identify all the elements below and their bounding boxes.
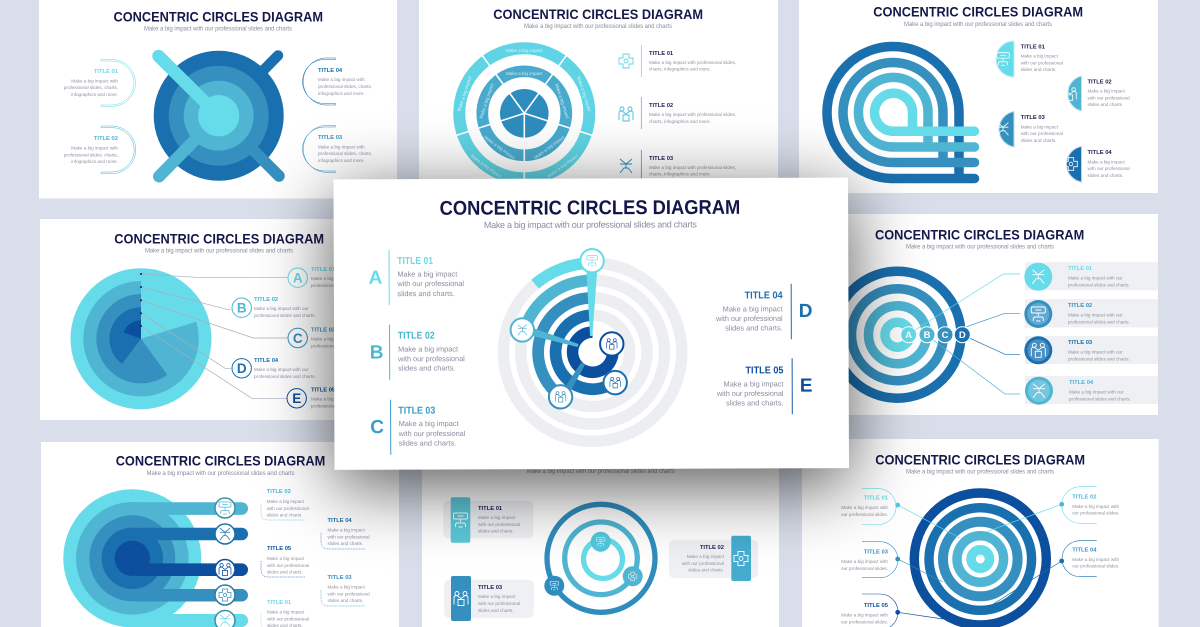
diagram: segmented rings and pie: Make a big impact bbox=[456, 75, 473, 112]
item B: title 02: slides and charts. bbox=[398, 363, 456, 373]
item: title 04: with our professional bbox=[1088, 166, 1130, 171]
item: title 02 bbox=[619, 97, 736, 129]
item: title 05: slides and charts. bbox=[267, 570, 303, 574]
main subheading: Make a big impact with our professional slides and charts bbox=[484, 219, 697, 230]
item: title 02 bbox=[232, 297, 316, 318]
connectors with arrows bbox=[915, 274, 1020, 394]
item: title 05 bbox=[841, 594, 943, 627]
grey background rings bbox=[503, 263, 682, 442]
item: title 04: TITLE 04 bbox=[1072, 548, 1097, 554]
row: title 02: professional slides and charts. bbox=[1068, 320, 1130, 324]
row: title 01 bbox=[1024, 262, 1158, 291]
item: title 03: our professional slides. bbox=[841, 566, 888, 571]
item: title 03 bbox=[998, 112, 1063, 147]
node: D icon bbox=[603, 371, 627, 394]
item: title 01: TITLE 01 bbox=[267, 600, 292, 606]
panel: middle-right slide, rings with lettered nodes bbox=[820, 214, 1158, 415]
item: title 01: Make a big impact with our bbox=[311, 276, 366, 281]
card: title 03 bbox=[444, 576, 534, 621]
item: title 05: with our professional bbox=[267, 563, 309, 568]
item: title 02: our professional slides. bbox=[1072, 510, 1119, 516]
item: title 02: Make a big impact bbox=[1088, 88, 1126, 94]
drop shadow of the central slide bbox=[334, 194, 849, 486]
item: title 02 bbox=[64, 126, 136, 174]
item: title 01: TITLE 01 bbox=[649, 51, 674, 57]
card: title 02: slides and charts. bbox=[688, 568, 724, 572]
item: title 01 bbox=[619, 45, 736, 77]
item: title 03: Make a big impact bbox=[328, 584, 366, 590]
item E: title 05: with our professional bbox=[716, 389, 784, 398]
item: title 03: Make a big impact with bbox=[318, 144, 365, 150]
item: title 01: charts, infographics and more. bbox=[649, 66, 711, 72]
item: title 04 bbox=[321, 518, 370, 549]
item C: title 03: C bbox=[370, 417, 384, 438]
lettered nodes: C bbox=[942, 330, 949, 341]
row: title 04: professional slides and charts. bbox=[1069, 396, 1131, 402]
subheading: Make a big impact with our professional slides and charts bbox=[527, 469, 675, 475]
item: title 04: professional slides and charts. bbox=[254, 374, 316, 379]
heading: CONCENTRIC CIRCLES DIAGRAM bbox=[114, 230, 324, 246]
item E: title 05: slides and charts. bbox=[726, 398, 784, 408]
row: title 03 bbox=[1024, 336, 1158, 364]
item C: title 03: Make a big impact bbox=[399, 419, 459, 428]
item: title 04: Make a big impact bbox=[328, 528, 366, 532]
item C: title 03: slides and charts. bbox=[399, 438, 456, 448]
row: title 02: Make a big impact with our bbox=[1068, 312, 1123, 318]
item: title 01: slides and charts. bbox=[1021, 67, 1056, 72]
item: title 03: Make a big impact with bbox=[841, 559, 888, 564]
diagram: rings bbox=[834, 271, 961, 398]
diagram: segmented rings and pie: Make a big impact bbox=[478, 82, 495, 119]
item: title 01: Make a big impact bbox=[1021, 54, 1059, 58]
card: title 01: Make a big impact bbox=[478, 515, 516, 520]
item: title 01 bbox=[288, 267, 373, 288]
item: title 01 bbox=[841, 489, 960, 538]
item: title 03: slides and charts. bbox=[1021, 138, 1056, 143]
item: title 05: TITLE 05 bbox=[267, 546, 292, 552]
radial bar chart bbox=[503, 249, 682, 442]
item: title 05: TITLE 05 bbox=[864, 603, 889, 609]
card: title 01 bbox=[443, 497, 533, 543]
item: title 03: professional slides, charts, bbox=[318, 151, 372, 156]
item: title 02: Make a big impact with our bbox=[254, 306, 309, 311]
item: title 01 bbox=[996, 41, 1063, 77]
item A: title 01: TITLE 01 bbox=[397, 256, 433, 267]
item: title 05: TITLE 05 bbox=[311, 388, 336, 394]
card: title 03: TITLE 03 bbox=[478, 585, 503, 591]
item: title 02: TITLE 02 bbox=[94, 136, 118, 142]
diagram: segmented rings and pie: Make a big impact bbox=[576, 76, 592, 113]
diagram: segmented rings and pie: Make a big impact bbox=[533, 134, 566, 160]
connector wedges bbox=[532, 272, 619, 392]
node: A icon bbox=[580, 249, 604, 272]
row: title 03: professional slides and charts. bbox=[1068, 356, 1130, 362]
item: title 05: professional slides and charts. bbox=[311, 404, 373, 408]
item B: title 02: with our professional bbox=[397, 354, 465, 363]
diagram: discs with bars bbox=[63, 489, 248, 627]
row: title 03: TITLE 03 bbox=[1068, 340, 1093, 346]
panel: top-left slide, target with crossing sticks bbox=[39, 0, 397, 198]
heading: CONCENTRIC CIRCLES DIAGRAM bbox=[114, 8, 323, 24]
item: title 05: Make a big impact with bbox=[841, 612, 888, 618]
item: title 03: Make a big impact with professional slides, bbox=[649, 165, 736, 170]
diagram: segmented rings and pie: Make a big impact bbox=[506, 71, 543, 76]
item: title 02: Make a big impact bbox=[267, 499, 305, 504]
node: B icon bbox=[511, 318, 534, 342]
item: title 04: TITLE 04 bbox=[1088, 150, 1112, 156]
item C: title 03 bbox=[370, 399, 466, 455]
row: title 02 bbox=[1024, 299, 1158, 328]
item: title 02: TITLE 02 bbox=[1072, 495, 1096, 501]
subheading: Make a big impact with our professional slides and charts bbox=[524, 24, 672, 30]
item: title 05: E bbox=[292, 391, 301, 406]
card: title 03: slides and charts. bbox=[478, 608, 514, 613]
row: title 04 bbox=[1025, 376, 1158, 405]
heading: CONCENTRIC CIRCLES DIAGRAM bbox=[493, 6, 703, 22]
item: title 04 bbox=[232, 358, 316, 379]
card: title 02 bbox=[669, 536, 758, 581]
icon nodes on bars bbox=[215, 498, 235, 627]
lettered nodes: A bbox=[905, 330, 912, 341]
item: title 01: A bbox=[293, 270, 303, 286]
item: title 05: Make a big impact with our bbox=[311, 396, 366, 402]
item: title 04: Make a big impact with bbox=[318, 77, 365, 82]
item D: title 04: with our professional bbox=[715, 314, 783, 323]
lettered nodes: D bbox=[959, 330, 966, 341]
item B: title 02 bbox=[370, 324, 465, 380]
item: title 03 bbox=[288, 328, 373, 348]
item: title 04: TITLE 04 bbox=[318, 68, 343, 74]
card: title 02: Make a big impact bbox=[687, 554, 725, 559]
item: title 02: TITLE 02 bbox=[649, 103, 673, 109]
card: title 02: with our professional bbox=[682, 561, 724, 566]
panel: top-right slide, nested arches bbox=[799, 0, 1158, 193]
card: title 03: with our professional bbox=[478, 601, 520, 606]
item: title 02 bbox=[987, 487, 1119, 532]
item: title 04: infographics and more. bbox=[318, 91, 365, 96]
item E: title 05: TITLE 05 bbox=[745, 365, 784, 376]
item: title 05: Make a big impact bbox=[267, 556, 305, 561]
item B: title 02: TITLE 02 bbox=[398, 331, 435, 342]
item: title 02 bbox=[1064, 76, 1130, 111]
item D: title 04 bbox=[715, 284, 813, 340]
item A: title 01: slides and charts. bbox=[397, 289, 455, 298]
item: title 01: Make a big impact bbox=[267, 610, 305, 614]
lettered nodes bbox=[901, 327, 970, 343]
item: title 03: infographics and more. bbox=[318, 158, 365, 163]
item: title 01: Make a big impact with professional slides, bbox=[649, 60, 736, 65]
panel: bottom-middle slide, orbit rings bbox=[422, 455, 779, 627]
row: title 01: professional slides and charts. bbox=[1068, 282, 1130, 288]
card: title 01: with our professional bbox=[478, 522, 520, 527]
item: title 03: with our professional bbox=[1021, 131, 1063, 136]
subheading: Make a big impact with our professional slides and charts bbox=[144, 26, 292, 32]
diagram: segmented rings and pie: Make a big impact bbox=[470, 153, 503, 179]
heading: CONCENTRIC CIRCLES DIAGRAM bbox=[875, 226, 1084, 242]
item: title 04: professional slides, charts, bbox=[318, 84, 372, 89]
item: title 03: TITLE 03 bbox=[864, 550, 889, 556]
item D: title 04: Make a big impact bbox=[723, 304, 783, 314]
row: title 04: TITLE 04 bbox=[1069, 380, 1094, 386]
item: title 03: TITLE 03 bbox=[1021, 115, 1046, 121]
panel: bottom-left slide, discs with extending bars bbox=[41, 442, 399, 627]
heading: CONCENTRIC CIRCLES DIAGRAM bbox=[875, 451, 1085, 467]
card: title 03: Make a big impact bbox=[478, 594, 516, 599]
item: title 03: TITLE 03 bbox=[328, 575, 352, 581]
item A: title 01 bbox=[369, 249, 464, 305]
diagram: segmented rings and pie: Make a big impact bbox=[554, 83, 570, 120]
coloured arcs bbox=[524, 263, 615, 396]
item: title 01: TITLE 01 bbox=[864, 496, 889, 502]
item D: title 04: TITLE 04 bbox=[745, 290, 783, 301]
item D: title 04: D bbox=[799, 301, 813, 322]
item: title 01: TITLE 01 bbox=[1021, 44, 1046, 50]
item: title 05 bbox=[261, 546, 309, 577]
item: title 04: with our professional bbox=[328, 534, 370, 540]
item: title 03: professional slides and charts. bbox=[311, 344, 373, 348]
item E: title 05: E bbox=[800, 376, 813, 397]
diagram: target rings bbox=[914, 493, 1046, 625]
item: title 03: with our professional bbox=[328, 592, 370, 596]
item: title 03: slides and charts. bbox=[328, 598, 363, 603]
item: title 04: slides and charts. bbox=[1088, 173, 1123, 178]
item: title 04: Make a big impact with our bbox=[254, 367, 309, 372]
item: title 04 bbox=[992, 541, 1119, 605]
item: title 02: with our professional bbox=[267, 506, 309, 511]
item A: title 01: A bbox=[369, 268, 383, 289]
item: title 01: TITLE 01 bbox=[94, 69, 119, 75]
diagram: segmented rings and pie: Make a big impact bbox=[483, 135, 516, 161]
item: title 03: Make a big impact bbox=[1021, 124, 1059, 130]
row: title 01: TITLE 01 bbox=[1068, 266, 1093, 272]
item: title 02: B bbox=[237, 300, 247, 316]
item: title 02: TITLE 02 bbox=[267, 489, 291, 495]
item: title 02: slides and charts. bbox=[267, 512, 302, 518]
item: title 01: with our professional bbox=[1021, 60, 1063, 66]
item: title 03: TITLE 03 bbox=[318, 135, 343, 141]
item: title 01: infographics and more. bbox=[71, 92, 118, 97]
item: title 01: professional slides, charts, bbox=[64, 85, 118, 90]
item: title 02: Make a big impact with bbox=[71, 146, 118, 150]
item: title 01: with our professional bbox=[267, 616, 309, 622]
item: title 03: C bbox=[293, 331, 303, 346]
node: E icon bbox=[600, 332, 624, 356]
item B: title 02: Make a big impact bbox=[398, 344, 458, 354]
panel: central featured slide bbox=[333, 178, 849, 470]
node: C icon bbox=[549, 385, 572, 409]
panel: bottom-right slide, target rings bbox=[802, 439, 1159, 627]
item: title 03: TITLE 03 bbox=[649, 156, 674, 162]
diagram: segmented rings and pie bbox=[453, 48, 596, 188]
item: title 04: our professional slides. bbox=[1072, 564, 1119, 568]
item: title 04 bbox=[302, 58, 372, 105]
item: title 04: TITLE 04 bbox=[254, 358, 279, 364]
card: title 01: slides and charts. bbox=[478, 528, 514, 534]
item: title 02: charts, infographics and more. bbox=[649, 119, 711, 124]
item: title 03: TITLE 03 bbox=[311, 328, 336, 334]
item: title 01 bbox=[261, 600, 309, 627]
item: title 05 bbox=[287, 388, 373, 408]
row: title 04: Make a big impact with our bbox=[1069, 390, 1124, 394]
item: title 01: professional slides and charts. bbox=[311, 283, 373, 288]
subheading: Make a big impact with our professional slides and charts bbox=[904, 22, 1052, 28]
subheading: Make a big impact with our professional slides and charts bbox=[145, 248, 293, 254]
diagram: nested arches with bars bbox=[827, 47, 974, 179]
item: title 02: slides and charts. bbox=[1088, 102, 1123, 107]
item: title 04: Make a big impact bbox=[1088, 160, 1126, 164]
card: title 02: TITLE 02 bbox=[700, 545, 724, 551]
item: title 01: TITLE 01 bbox=[311, 267, 336, 273]
item A: title 01: with our professional bbox=[396, 279, 464, 288]
item: title 01: Make a big impact with bbox=[71, 78, 118, 84]
main heading: CONCENTRIC CIRCLES DIAGRAM bbox=[440, 197, 740, 220]
item: title 01: Make a big impact with bbox=[841, 505, 888, 510]
item B: title 02: B bbox=[370, 342, 384, 363]
item: title 01 bbox=[64, 60, 136, 106]
item: title 04: Make a big impact with bbox=[1072, 557, 1119, 562]
item A: title 01: Make a big impact bbox=[397, 269, 457, 279]
row: title 01: Make a big impact with our bbox=[1068, 276, 1123, 280]
item C: title 03: with our professional bbox=[398, 429, 466, 438]
heading: CONCENTRIC CIRCLES DIAGRAM bbox=[873, 4, 1083, 20]
item: title 04 bbox=[1065, 146, 1130, 182]
item: title 03 bbox=[302, 126, 372, 172]
item: title 05: our professional slides. bbox=[841, 620, 888, 624]
diagram: segmented rings and pie: Make a big impact bbox=[506, 48, 543, 53]
item C: title 03: TITLE 03 bbox=[398, 406, 436, 417]
item: title 04: TITLE 04 bbox=[328, 518, 352, 524]
diagram: segmented rings and pie: Make a big impact bbox=[546, 153, 579, 179]
diagram: stepped pie bbox=[70, 268, 212, 409]
row: title 03: Make a big impact with our bbox=[1068, 350, 1123, 354]
card: title 01: TITLE 01 bbox=[478, 506, 503, 512]
item: title 02 bbox=[261, 489, 309, 520]
item: title 02: with our professional bbox=[1088, 96, 1130, 100]
lettered nodes: B bbox=[924, 330, 931, 341]
item E: title 05: Make a big impact bbox=[724, 379, 784, 389]
subheading: Make a big impact with our professional slides and charts bbox=[146, 471, 294, 477]
subheading: Make a big impact with our professional slides and charts bbox=[906, 244, 1054, 250]
item: title 04: slides and charts. bbox=[328, 541, 363, 546]
item: title 03: charts, infographics and more. bbox=[649, 172, 711, 176]
subheading: Make a big impact with our professional slides and charts bbox=[906, 469, 1054, 475]
leader lines bbox=[140, 273, 287, 398]
item E: title 05 bbox=[716, 358, 813, 415]
panel: top-middle slide, segmented rings bbox=[419, 0, 778, 188]
item: title 04: D bbox=[237, 361, 247, 376]
row: title 02: TITLE 02 bbox=[1068, 303, 1092, 309]
item: title 02: Make a big impact with professional slides, bbox=[649, 112, 736, 117]
item: title 02: professional slides and charts. bbox=[254, 313, 316, 318]
item: title 02: infographics and more. bbox=[71, 159, 118, 164]
item: title 03: Make a big impact with our bbox=[311, 336, 366, 342]
item: title 02: TITLE 02 bbox=[254, 297, 278, 303]
item: title 03 bbox=[841, 542, 943, 582]
centre hole bbox=[578, 338, 607, 367]
item: title 02: TITLE 02 bbox=[1088, 80, 1112, 86]
item: title 02: Make a big impact with bbox=[1072, 504, 1119, 509]
diagram: orbit rings with nodes bbox=[544, 504, 655, 612]
item: title 01: our professional slides. bbox=[841, 512, 888, 517]
item: title 03 bbox=[620, 150, 736, 182]
panel: middle-left slide, stepped pie bbox=[40, 219, 373, 420]
item: title 02: professional slides, charts, bbox=[64, 152, 118, 158]
diagram: concentric discs with sticks bbox=[154, 51, 284, 181]
item: title 03 bbox=[321, 575, 370, 606]
heading: CONCENTRIC CIRCLES DIAGRAM bbox=[116, 453, 325, 469]
item D: title 04: slides and charts. bbox=[725, 323, 783, 333]
